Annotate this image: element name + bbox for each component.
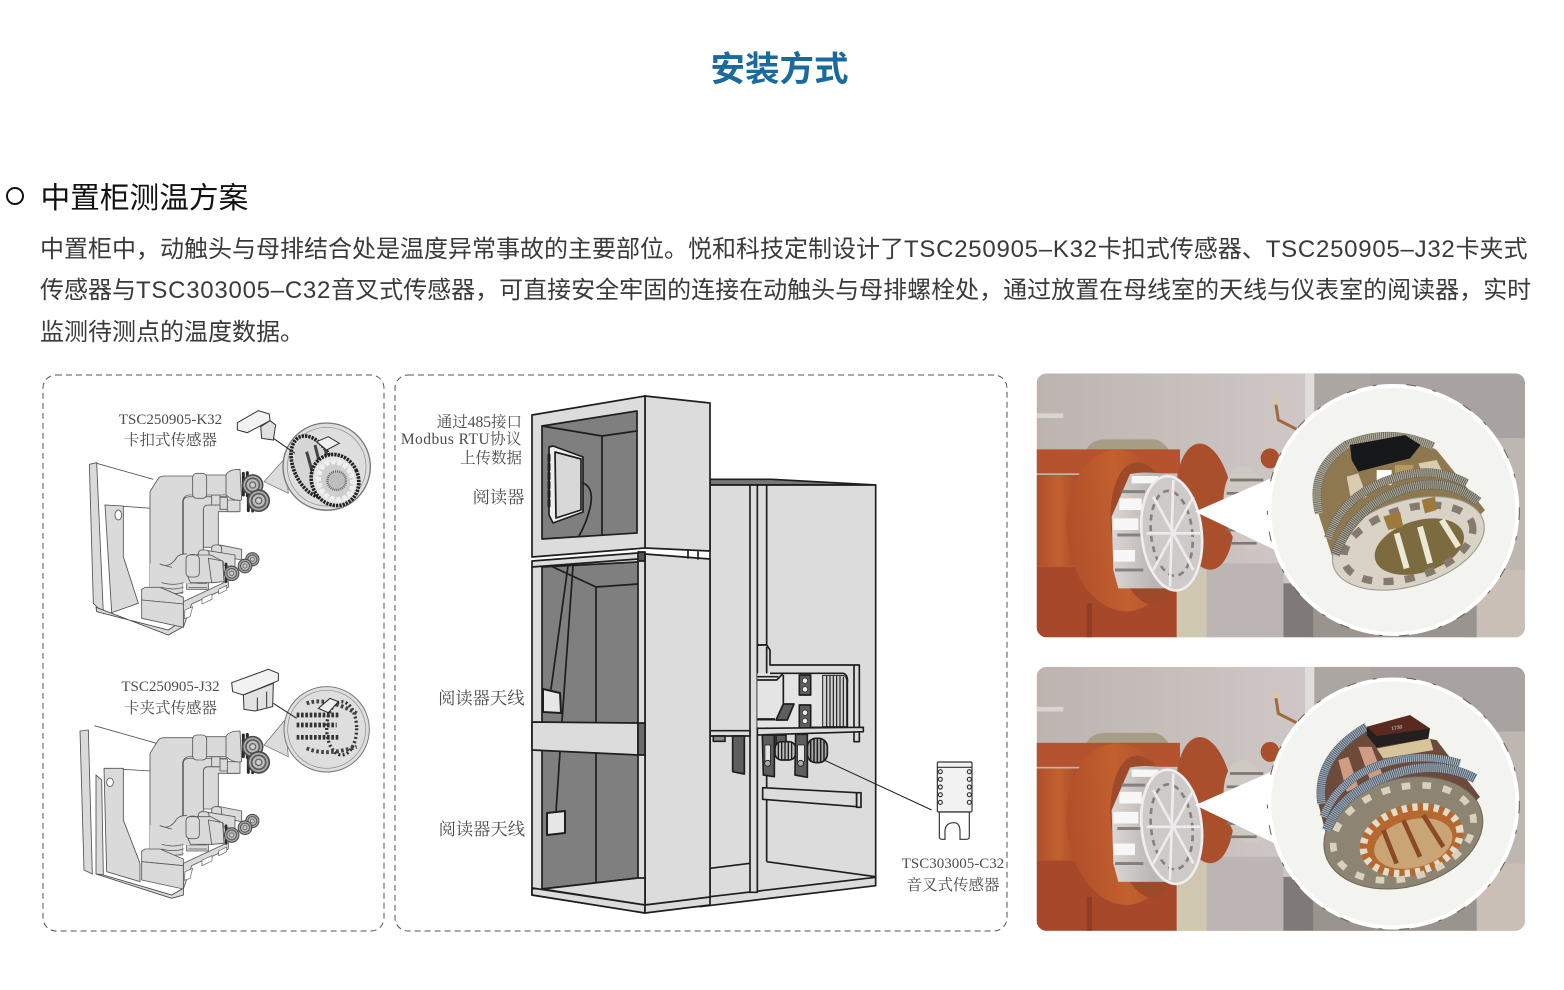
icon: K32 sensor part <box>237 411 276 440</box>
lower busbar and cable compartment <box>532 551 710 913</box>
panel: installation diagrams left: 卡夹式传感器 <box>124 699 217 717</box>
panel border <box>395 375 1007 931</box>
K32 sensor <box>1315 435 1496 607</box>
icon: tuning fork sensor <box>937 762 972 839</box>
title: 安装方式 <box>710 51 848 89</box>
icon: K32 magnified sensor <box>273 423 370 513</box>
photo: K32 sensor on contact <box>1037 373 1525 637</box>
label: RS485 upload: Modbus RTU协议 <box>401 430 522 448</box>
panel: installation diagrams left: 卡扣式传感器 <box>124 431 217 449</box>
icon: section bullet <box>6 187 24 205</box>
label: C32 sensor <box>902 856 1004 894</box>
photo: J32 sensor on contact <box>1037 667 1525 931</box>
label: RS485 upload: 上传数据 <box>460 449 522 467</box>
description text: 传感器与TSC303005–C32音叉式传感器，可直接安全牢固的连接在动触头与母排螺栓处，通过放置在母线室的天线与仪表室的阅读器，实时 <box>40 277 1531 304</box>
label: reader: 阅读器 <box>473 488 524 507</box>
label: reader antenna upper: 阅读器天线 <box>438 689 524 708</box>
K32 breaker illustration <box>89 458 288 635</box>
label: C32 sensor: TSC303005-C32 <box>902 856 1004 872</box>
label: reader antenna lower: 阅读器天线 <box>439 820 525 839</box>
right cabinet section <box>700 479 932 907</box>
icon: reader device <box>549 446 591 536</box>
panel: switchgear cabinet diagram <box>395 375 1007 931</box>
label: RS485 upload <box>401 413 522 467</box>
description text <box>40 236 1531 346</box>
J32 sensor <box>1311 715 1496 906</box>
J32 label: TSC250905-J32 <box>121 679 220 695</box>
icon: antenna upper <box>543 689 561 713</box>
panel: installation diagrams left <box>43 375 384 931</box>
description text: 中置柜中，动触头与母排结合处是温度异常事故的主要部位。悦和科技定制设计了TSC250905–K32卡扣式传感器、TSC250905–J32卡夹式 <box>40 236 1528 262</box>
icon: antenna lower <box>547 811 565 835</box>
description text: 监测待测点的温度数据。 <box>40 318 304 346</box>
panel border <box>43 375 384 931</box>
section heading: 中置柜测温方案 <box>40 182 248 214</box>
K32 label: TSC250905-K32 <box>119 412 222 428</box>
label: C32 sensor: 音叉式传感器 <box>906 876 1000 894</box>
J32 breaker illustration <box>80 669 369 898</box>
label: RS485 upload: 通过485接口 <box>437 413 522 431</box>
upper reader compartment <box>532 396 710 557</box>
J32 sensor: 1730 <box>1391 724 1403 732</box>
